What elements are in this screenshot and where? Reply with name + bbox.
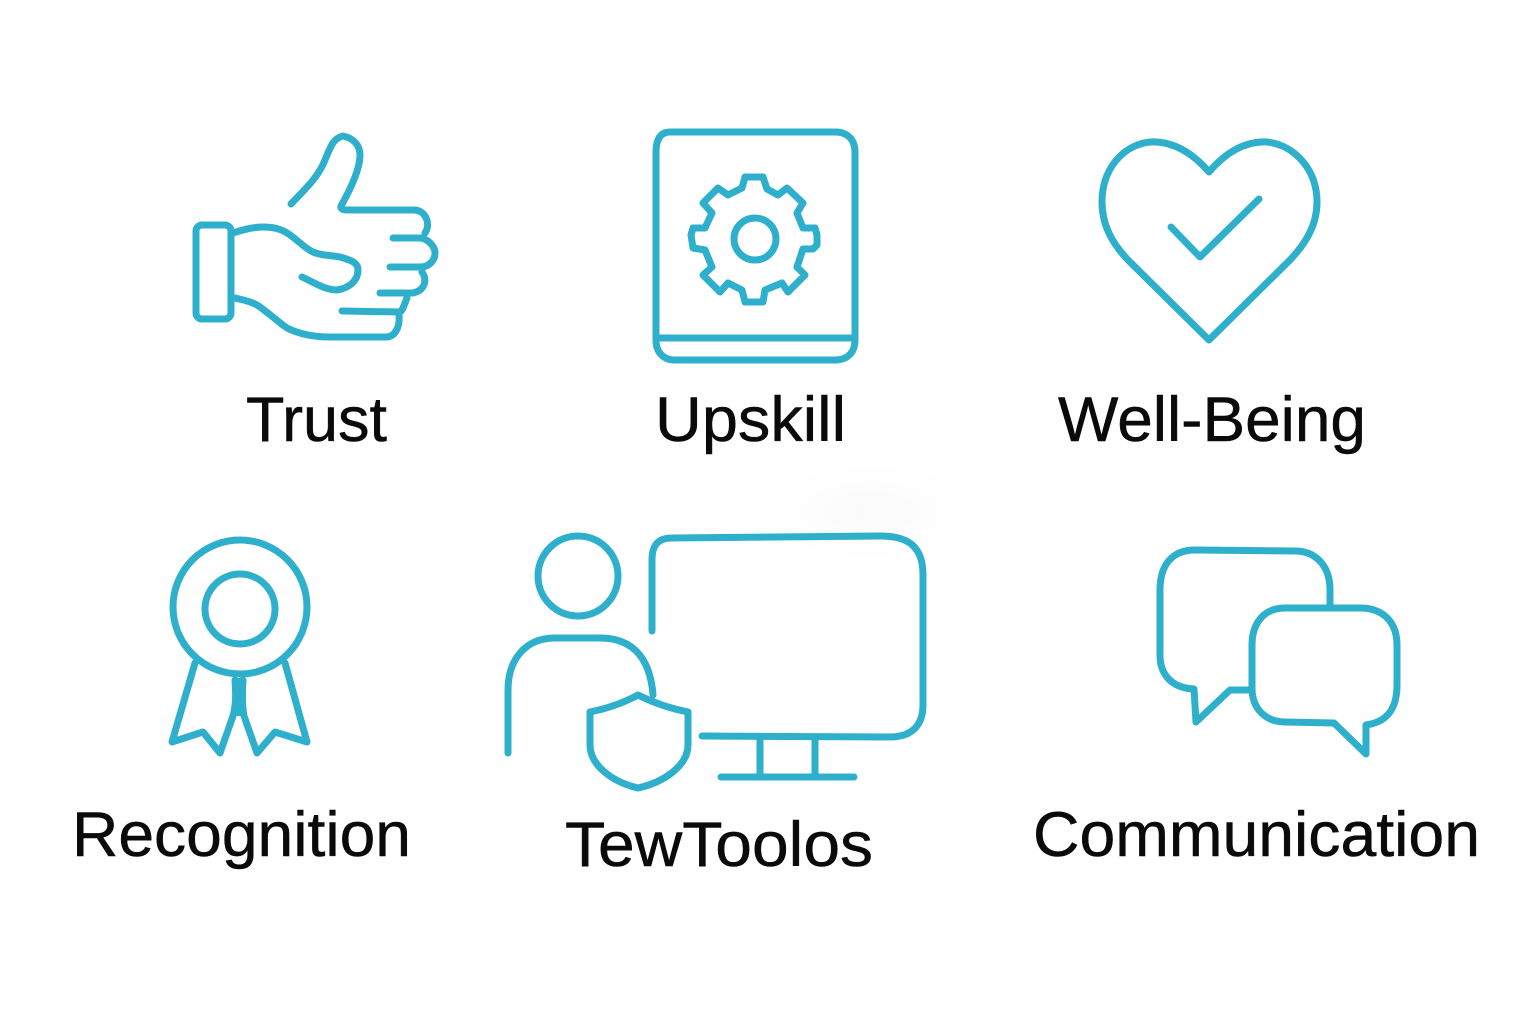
- label: New Tools: TewToolos: [565, 810, 873, 880]
- label: Upskill: Upskill: [655, 385, 846, 455]
- icon: person with shield and monitor: [508, 536, 923, 788]
- icon: heart with check: [1102, 142, 1317, 340]
- label: Communication: Communication: [1033, 800, 1480, 870]
- label: Recognition: Recognition: [72, 800, 411, 870]
- label: Well-Being: Well-Being: [1058, 385, 1366, 455]
- icon: chat bubbles: [1160, 550, 1397, 754]
- icon: thumbs up: [196, 136, 435, 337]
- icon: award ribbon: [172, 540, 307, 753]
- icon: book with gear: [656, 132, 855, 360]
- label: Trust: Trust: [246, 385, 387, 455]
